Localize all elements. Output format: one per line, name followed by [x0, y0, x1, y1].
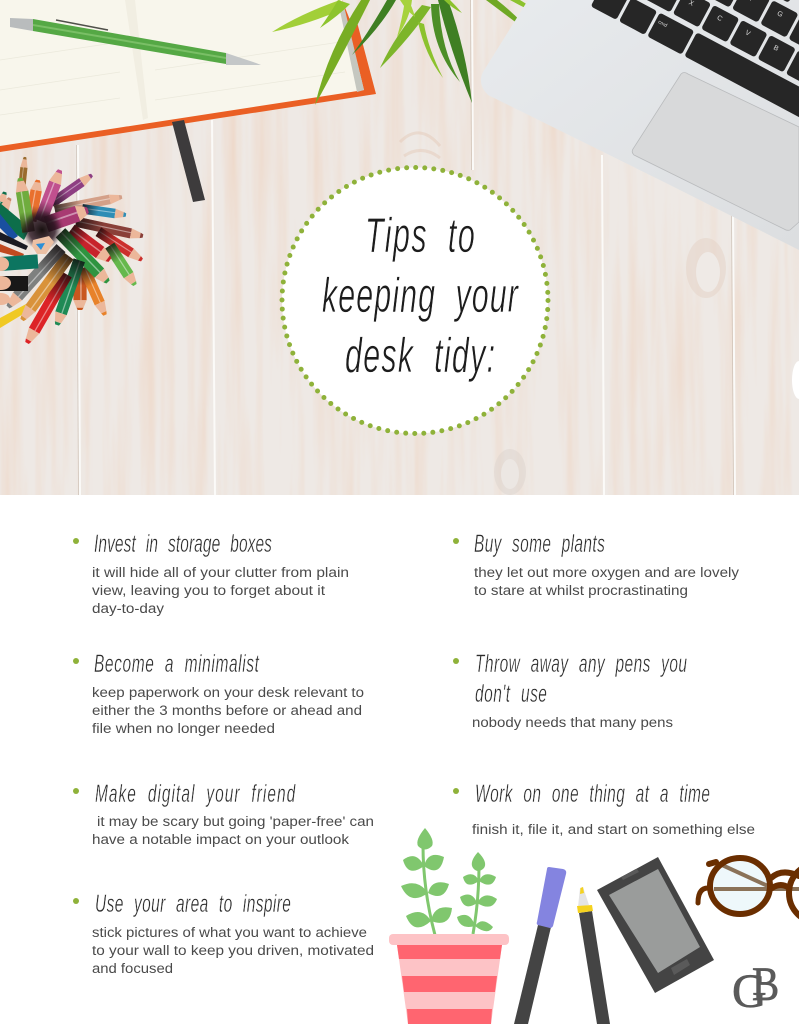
title: Tips to [365, 208, 475, 263]
tip: storage boxes: day-to-day [92, 601, 164, 616]
icon: smartphone [597, 857, 714, 993]
tip: inspire: to your wall to keep you driven, motivated [92, 943, 374, 958]
logo [732, 957, 779, 1018]
laptop [481, 0, 799, 250]
tip: minimalist: Become a minimalist [94, 650, 260, 678]
keyboard keys: G [776, 10, 784, 19]
tip: storage boxes: Invest in storage boxes [94, 530, 272, 558]
logo: B [752, 957, 779, 1011]
icon: fine pen [577, 887, 610, 1024]
keyboard keys: V [744, 29, 752, 38]
logo: G [732, 965, 767, 1018]
tip: pens: Throw away any pens you [475, 650, 687, 678]
tip: storage boxes: it will hide all of your clutter from plain [92, 565, 349, 580]
blue-tip pencil end [32, 236, 54, 254]
tip: inspire [73, 890, 374, 976]
tip: plants [453, 530, 739, 598]
title [322, 208, 519, 383]
tip: one thing: finish it, file it, and start on something else [472, 822, 755, 837]
tip: minimalist: either the 3 months before or ahead and [92, 703, 362, 718]
tip: digital: have a notable impact on your outlook [92, 832, 349, 847]
keyboard keys: cmd [657, 19, 668, 29]
tip: one thing [453, 780, 755, 837]
tip: plants: to stare at whilst procrastinating [474, 583, 688, 598]
tips section background [0, 495, 799, 1024]
bookmark ribbon [172, 120, 205, 202]
tip: inspire: and focused [92, 961, 173, 976]
tip: plants: Buy some plants [474, 530, 605, 558]
notebook [0, 0, 376, 202]
tip: plants: they let out more oxygen and are lovely [474, 565, 739, 580]
tip: digital: it may be scary but going 'paper-free' can [97, 814, 374, 829]
tip: inspire: stick pictures of what you want to achieve [92, 925, 367, 940]
keyboard keys: C [716, 14, 723, 23]
title: keeping your [322, 268, 519, 323]
tip: pens: nobody needs that many pens [472, 715, 673, 730]
tip: one thing: Work on one thing at a time [475, 780, 710, 808]
tip: pens [453, 650, 687, 730]
tip: inspire: Use your area to inspire [95, 890, 291, 918]
icon: marker pen [514, 867, 566, 1024]
tip: pens: don't use [475, 680, 547, 708]
pencils in a cup [0, 157, 145, 346]
plant leaves at top [272, 0, 597, 105]
tip: minimalist: keep paperwork on your desk relevant to [92, 685, 364, 700]
tip: storage boxes: view, leaving you to forget about it [92, 583, 325, 598]
trackpad [632, 72, 799, 230]
tip: storage boxes [73, 530, 349, 616]
icon: glasses [698, 858, 799, 923]
tip: minimalist [73, 650, 364, 736]
tip: digital [73, 780, 374, 847]
title circle [282, 168, 548, 434]
green pen [10, 18, 261, 65]
tip: digital: Make digital your friend [95, 780, 296, 808]
tip: minimalist: file when no longer needed [92, 721, 275, 736]
title: desk tidy: [345, 328, 495, 383]
wood desk background [0, 0, 799, 495]
icon: potted plant [389, 828, 509, 1024]
keyboard keys: B [772, 45, 780, 53]
keyboard keys [591, 0, 799, 145]
